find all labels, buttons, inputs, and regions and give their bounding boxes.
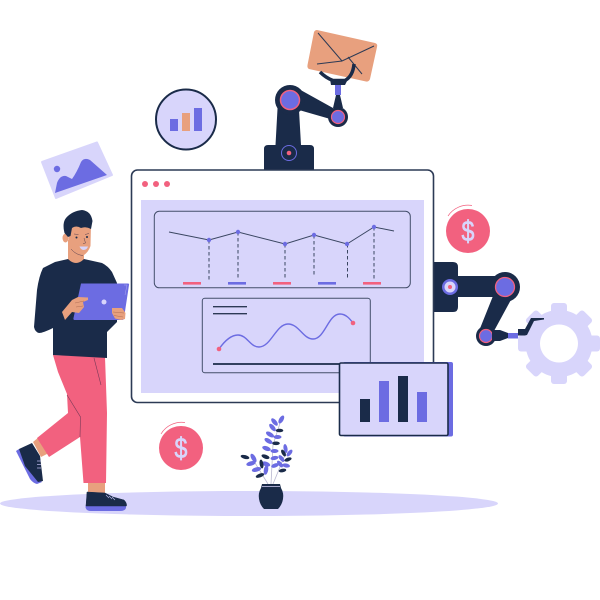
coin: bottom left: $ <box>175 431 188 465</box>
person <box>16 210 129 511</box>
coin: right: $ <box>462 214 475 248</box>
floating bar chart card <box>340 362 453 436</box>
coin: bottom left <box>159 422 203 470</box>
front shoe <box>86 492 127 511</box>
back shoe <box>16 443 43 484</box>
tablet <box>73 284 129 320</box>
back leg skin <box>33 437 51 457</box>
hair <box>64 210 92 237</box>
face <box>68 224 91 256</box>
sweater <box>34 259 117 358</box>
envelope <box>307 30 377 82</box>
ear <box>62 234 68 242</box>
coin: right <box>446 205 490 253</box>
robot arm: right gripping gear <box>433 262 544 346</box>
right hand <box>112 308 126 320</box>
icon: bar chart badge <box>156 90 216 150</box>
pants <box>37 355 107 483</box>
potted plant <box>240 415 294 509</box>
curve chart panel <box>202 298 370 373</box>
neck <box>68 240 84 265</box>
icon: gear <box>518 303 600 384</box>
left hand <box>62 297 88 320</box>
face details <box>71 234 89 256</box>
window control dots <box>142 181 170 187</box>
window content panel <box>141 200 424 393</box>
front ankle <box>88 480 105 495</box>
ground ellipse <box>0 491 498 516</box>
line chart panel <box>154 211 410 288</box>
gripper claw <box>320 64 354 80</box>
robot arm: top holding envelope <box>264 30 377 170</box>
icon: picture card <box>42 142 112 198</box>
browser window <box>132 170 434 402</box>
